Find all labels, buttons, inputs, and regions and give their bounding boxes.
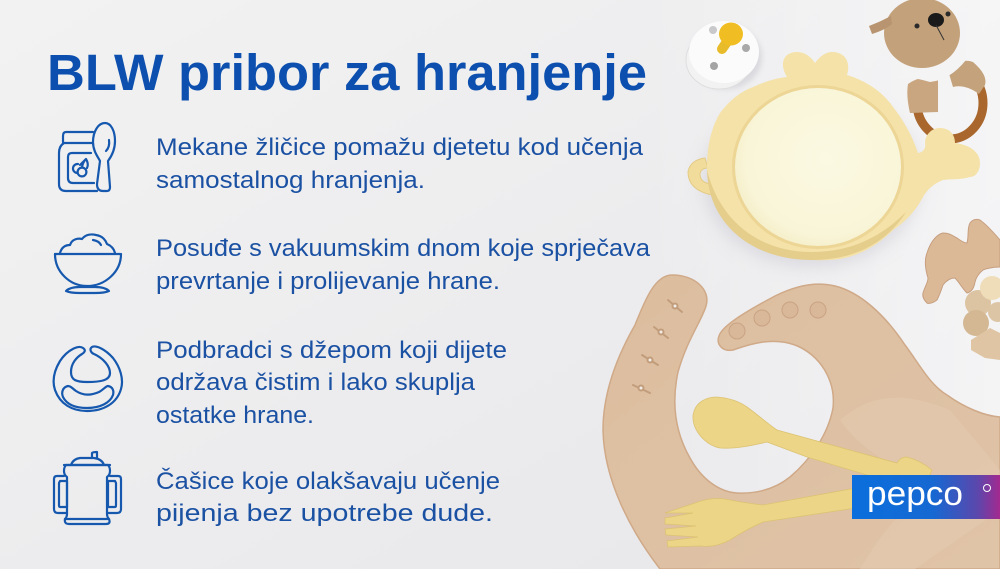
icon: bib <box>54 346 122 411</box>
icon: bowl <box>55 234 121 293</box>
logo: pepco: pepco <box>867 475 963 513</box>
text: spoons: samostalnog hranjenja. <box>156 167 425 194</box>
photo: whale bowl with porridge <box>688 52 980 266</box>
photo: pacifier <box>686 21 762 89</box>
text: bibs: Podbradci s džepom koji dijete <box>156 337 507 364</box>
photo: wooden teether <box>923 219 1000 360</box>
text: bibs: održava čistim i lako skuplja <box>156 369 476 396</box>
text: bibs: ostatke hrane. <box>156 402 314 429</box>
text: bowls: prevrtanje i prolijevanje hrane. <box>156 268 500 295</box>
text: bowls: Posuđe s vakuumskim dnom koje sprječava <box>156 235 651 262</box>
text: cups: Čašice koje olakšavaju učenje <box>156 467 500 495</box>
photo: crochet teddy rattle <box>869 0 986 139</box>
title: BLW pribor za hranjenje <box>47 44 647 101</box>
icon: sippy cup <box>54 452 121 524</box>
text: spoons: Mekane žličice pomažu djetetu kod učenja <box>156 134 644 161</box>
photo: silicone bib <box>603 275 1000 569</box>
icon: baby food jar and spoon <box>59 123 115 191</box>
photo: yellow fork <box>665 488 856 547</box>
text: cups: pijenja bez upotrebe dude. <box>156 500 493 527</box>
logo: pepco <box>852 475 1000 519</box>
photo: yellow spoon <box>693 397 932 487</box>
